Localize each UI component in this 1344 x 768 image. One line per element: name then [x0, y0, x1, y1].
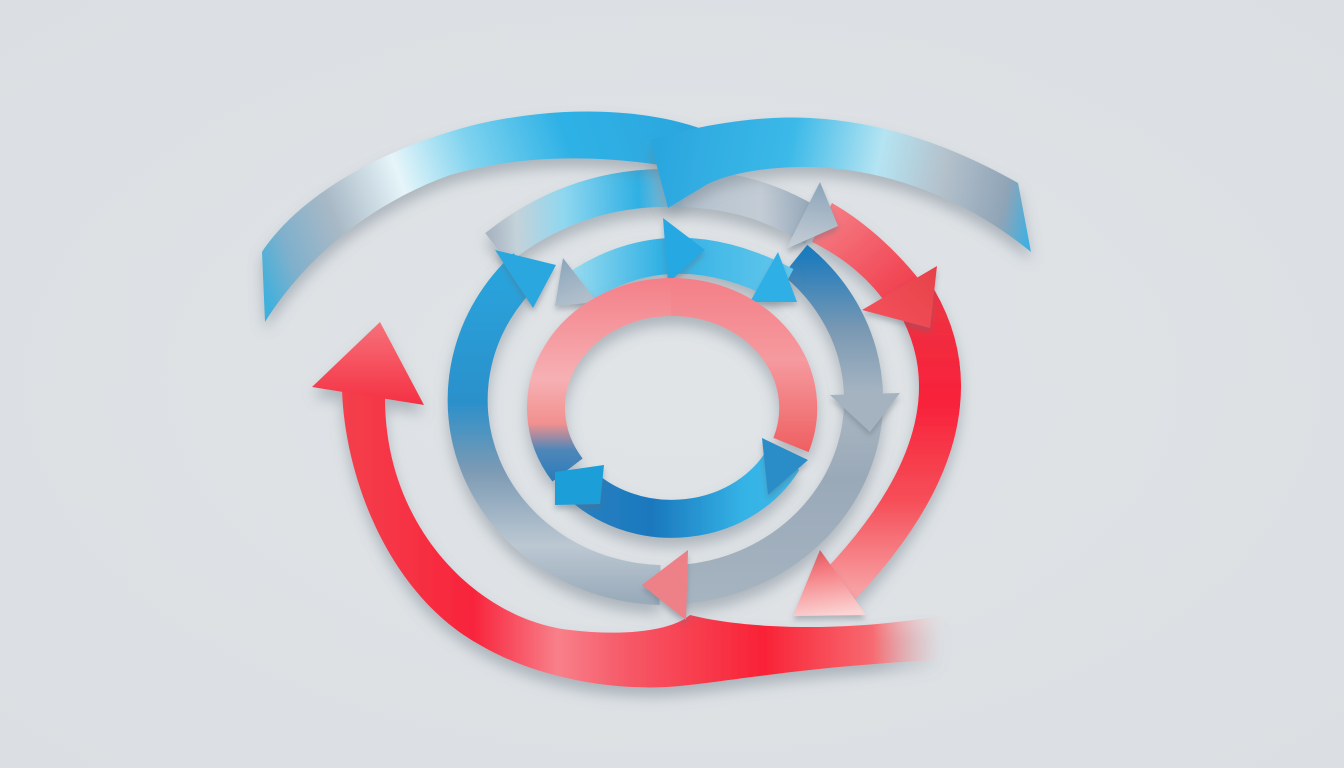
arrow: red head on right ribbon: [862, 266, 937, 328]
ring: inner ring pink and blue: [546, 297, 798, 519]
arrow: pink head at bottom of middle ring: [642, 550, 688, 620]
ribbon: middle ring left arc: [468, 268, 660, 585]
ribbon: right red upper segment: [812, 203, 921, 306]
ribbon: top-right sweeping arrow: [650, 117, 1031, 252]
arrow: big red head: [312, 322, 424, 405]
arrow: pale pink head at bottom right: [793, 550, 866, 616]
arrow: blue square head lower left: [555, 465, 604, 505]
arrow: gray head at top right: [786, 182, 838, 249]
arrow: blue head lower right: [762, 438, 808, 495]
arrow: blue head right inner arc: [750, 252, 797, 302]
ribbon: second ring top arc: [497, 188, 815, 248]
arrow: blue head mid inner arc: [663, 218, 705, 283]
ribbon: middle ring right arc: [670, 260, 864, 585]
arrow: gray head on inner arc: [555, 258, 597, 306]
ribbon: top-left sweeping blue and silver: [262, 111, 705, 322]
arrow: blue head on middle ring: [495, 250, 556, 308]
ribbon: right red lower segment: [840, 300, 940, 585]
arrow: gray head on right of middle ring: [830, 393, 900, 432]
ribbon: inner top blue arc: [575, 256, 785, 290]
ribbon: big red bottom sweep with arrow: [312, 322, 945, 687]
